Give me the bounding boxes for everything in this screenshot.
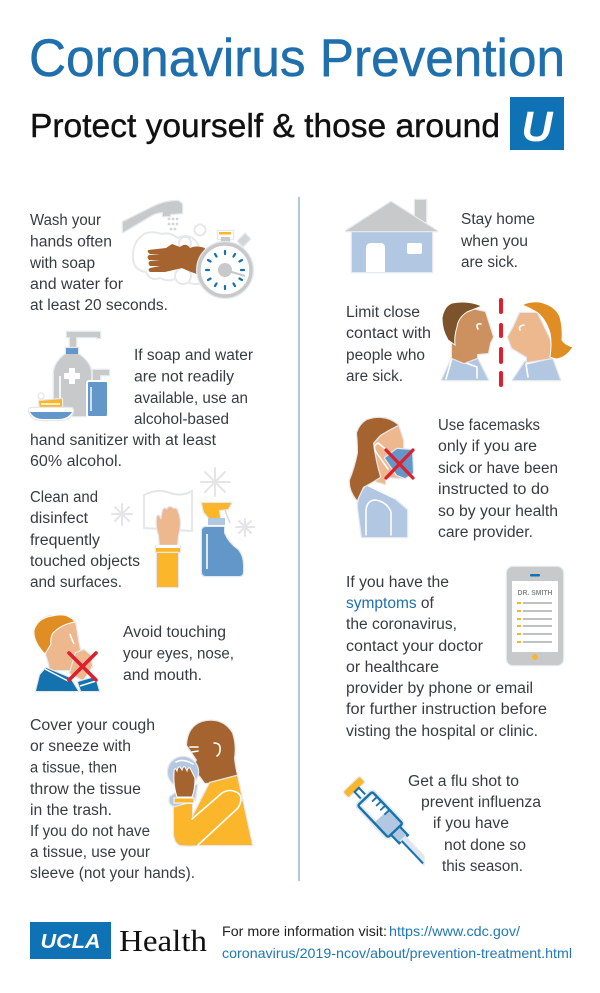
text: clean surfaces: disinfect [30, 510, 89, 527]
text: wash hands: with soap [29, 255, 95, 272]
footer: more information link [222, 923, 572, 961]
text: facemasks: sick or have been [438, 460, 558, 477]
footer: UCLA Health logo: Health [119, 923, 208, 958]
text: avoid touching [123, 624, 234, 684]
text: facemasks: instructed to do [438, 481, 549, 498]
icon: phone with doctor contact [507, 567, 563, 665]
text: cover cough: If you do not have [30, 823, 150, 840]
icon: house [346, 200, 437, 272]
text: sanitizer: alcohol-based [134, 411, 229, 428]
panel: cover cough [30, 717, 252, 882]
icon: hand washing and stopwatch [123, 201, 253, 298]
icon: syringe [344, 777, 433, 869]
text: limit contact: people who [346, 347, 425, 364]
text: contact doctor [346, 574, 547, 740]
panel: clean surfaces [30, 468, 254, 591]
text: flu shot: if you have [433, 815, 509, 832]
footer: more information link: coronavirus/2019-ncov/about/prevention-treatment.html [222, 945, 572, 961]
icon: phone with doctor contact: DR. SMITH [518, 588, 552, 597]
icon: woman in mask with cross [350, 418, 413, 537]
column divider [298, 197, 300, 881]
panel: facemasks [350, 417, 558, 541]
text: wash hands: hands often [30, 234, 112, 250]
text: wash hands: and water for [30, 276, 123, 293]
text: avoid touching: and mouth. [123, 667, 202, 684]
text: clean surfaces: and surfaces. [30, 574, 122, 591]
text: limit contact [346, 304, 431, 385]
subtitle: Protect yourself & those around [30, 107, 500, 144]
text: limit contact: Limit close [346, 304, 420, 321]
text: clean surfaces: Clean and [30, 489, 98, 506]
title: Coronavirus Prevention [29, 29, 565, 88]
icon: U logo [510, 97, 564, 151]
text: facemasks: care provider. [438, 524, 533, 541]
icon: man touching face [34, 615, 99, 691]
text: limit contact: contact with [346, 325, 431, 342]
text: clean surfaces [30, 489, 140, 591]
icon: two faces separated by dashed line [442, 300, 573, 385]
text: contact doctor: the coronavirus, [346, 616, 457, 633]
text: stay home: when you [460, 233, 528, 250]
text: contact doctor: visting the hospital or clinic. [346, 723, 538, 740]
text: cover cough: throw the tissue [30, 781, 141, 798]
text: flu shot: not done so [444, 837, 526, 854]
text: facemasks: only if you are [438, 438, 537, 455]
text: contact doctor: for further instruction before [346, 701, 547, 718]
text: contact doctor: provider by phone or email [346, 680, 533, 697]
text: contact doctor: symptoms of [346, 595, 435, 612]
text: contact doctor: contact your doctor [346, 638, 483, 655]
text: facemasks [438, 417, 558, 541]
text: contact doctor: If you have the [346, 574, 449, 591]
text: sanitizer: If soap and water [134, 347, 253, 364]
icon: pump bottles and soap dish [29, 332, 109, 420]
text: wash hands: at least 20 seconds. [30, 297, 168, 314]
icon: U logo: U [521, 103, 553, 151]
text: facemasks: Use facemasks [438, 417, 540, 434]
text: avoid touching: your eyes, nose, [123, 646, 234, 662]
footer: more information link: For more information visit: [222, 923, 387, 939]
text: cover cough: a tissue, then [30, 760, 117, 776]
text: cover cough: a tissue, use your [30, 844, 150, 861]
panel: avoid touching face [34, 615, 234, 691]
footer: UCLA Health logo [30, 922, 208, 959]
text: clean surfaces: frequently [30, 532, 100, 549]
panel: limit contact [346, 300, 573, 385]
text: flu shot: this season. [442, 858, 523, 875]
text: facemasks: so by your health [438, 503, 558, 520]
text: stay home [460, 211, 535, 271]
text: avoid touching: Avoid touching [123, 624, 226, 641]
text: wash hands [29, 212, 168, 314]
text: cover cough: in the trash. [30, 802, 112, 819]
text: flu shot: prevent influenza [421, 794, 541, 811]
text: sanitizer: are not readily [134, 368, 234, 386]
panel: contact doctor [346, 567, 563, 740]
text: cover cough: sleeve (not your hands). [30, 865, 195, 882]
text: clean surfaces: touched objects [30, 553, 140, 570]
panel: stay home [346, 200, 535, 272]
text: flu shot [408, 773, 541, 875]
text: sanitizer: 60% alcohol. [30, 453, 122, 470]
text: cover cough: Cover your cough [30, 717, 155, 734]
text: stay home: are sick. [461, 254, 518, 271]
panel: wash hands [29, 201, 253, 314]
panel: flu shot [344, 773, 541, 875]
text: wash hands: Wash your [30, 212, 101, 229]
footer: more information link: https://www.cdc.gov/ [389, 923, 520, 939]
text: cover cough: or sneeze with [30, 738, 131, 755]
icon: hand with cloth and spray bottle [112, 468, 254, 587]
text: cover cough [30, 717, 195, 882]
text: sanitizer: available, use an [134, 390, 248, 407]
text: sanitizer: hand sanitizer with at least [30, 432, 217, 449]
footer: UCLA Health logo: UCLA [40, 931, 100, 953]
text: sanitizer [30, 347, 253, 470]
text: stay home: Stay home [461, 211, 535, 228]
icon: person coughing into tissue [168, 721, 252, 846]
text: flu shot: Get a flu shot to [408, 773, 519, 790]
text: contact doctor: or healthcare [346, 659, 439, 676]
panel: sanitizer [29, 332, 253, 470]
text: limit contact: are sick. [346, 368, 403, 385]
